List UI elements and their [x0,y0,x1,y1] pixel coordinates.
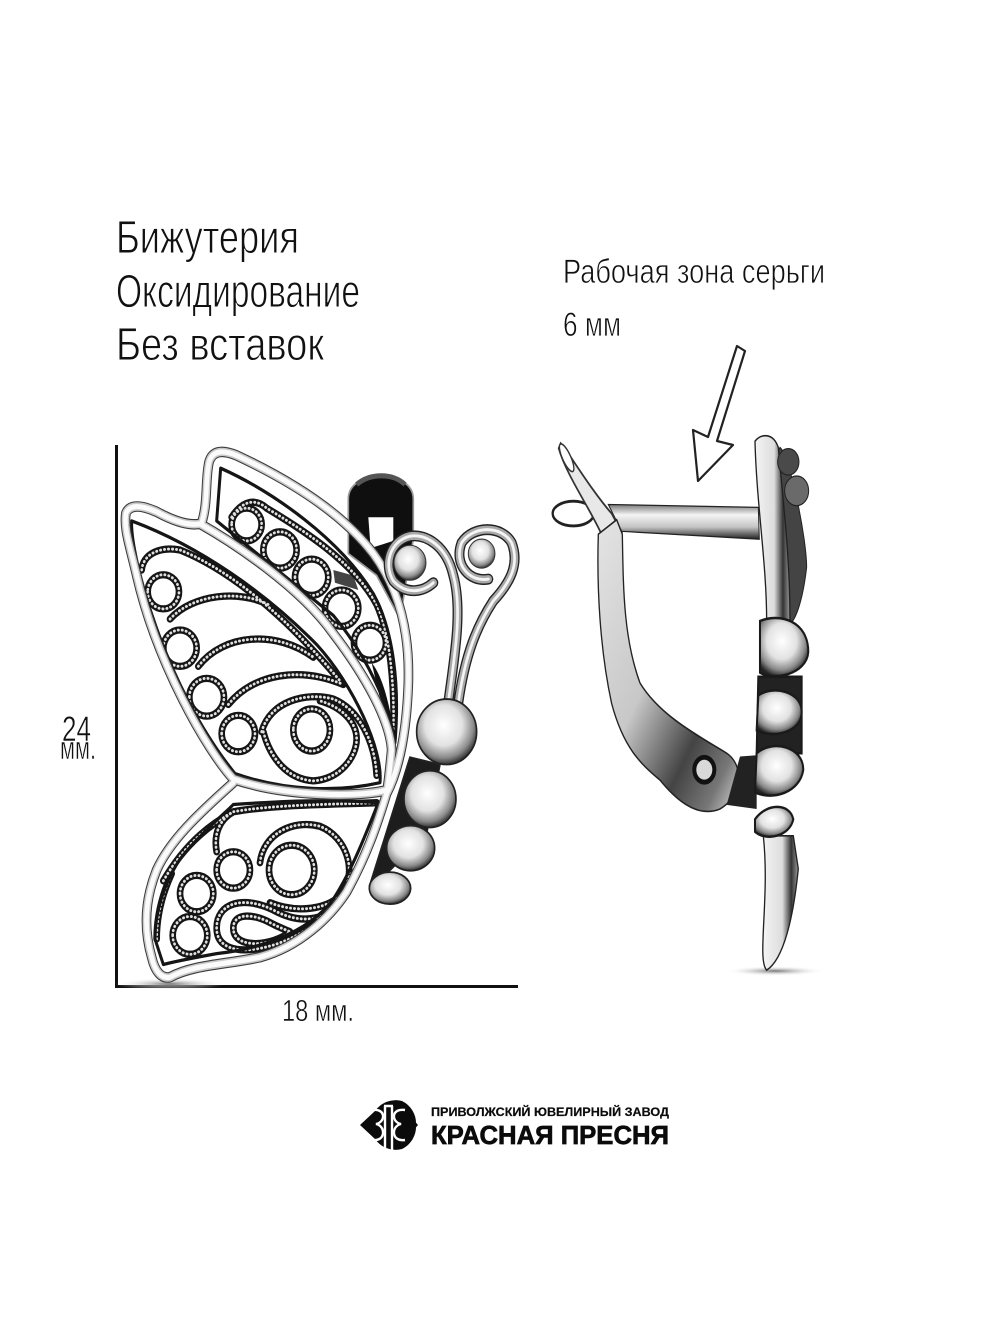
arrow: points to working zone [693,346,745,481]
text block: working zone: Рабочая зона серьги [563,253,825,291]
lower wing strip [763,836,798,970]
earring side view [553,436,809,970]
height label: 24 mm: мм. [60,730,96,766]
text block: product properties: Без вставок [116,318,325,370]
upper wing strip [773,447,807,625]
top beads [778,449,799,475]
pin bar [608,504,759,539]
antennae [389,530,515,703]
pin loop [553,501,594,526]
body beads [369,699,477,904]
ground shadows [115,966,825,990]
wing filigree [142,502,394,954]
logo [360,1100,669,1150]
rivet [694,757,714,782]
logo text: ПРИВОЛЖСКИЙ ЮВЕЛИРНЫЙ ЗАВОД [431,1104,669,1119]
antenna beads [394,539,495,580]
silver wing frame [125,452,408,977]
logo: КРАСНАЯ ПРЕСНЯ [431,1120,669,1150]
height label: 24 mm: 24 [62,710,91,749]
dimension axes [115,445,518,988]
lever body [598,520,739,812]
dark backing behind upper wing [333,570,395,739]
text block: working zone: 6 мм [563,306,621,344]
height label: 24 mm [60,710,96,766]
hinge [727,755,757,809]
text block: product properties [116,211,360,370]
ear clip behind wing [348,476,413,619]
text block: working zone [563,253,825,344]
logo mark [360,1100,418,1150]
body beads, side [755,618,808,837]
text block: product properties: Оксидирование [116,265,360,317]
text block: product properties: Бижутерия [116,211,299,263]
lever hook [559,443,622,538]
wing inner dark edges [132,468,397,964]
width label: 18 mm: 18 мм. [282,993,354,1028]
butterfly earring, front view [125,452,515,977]
